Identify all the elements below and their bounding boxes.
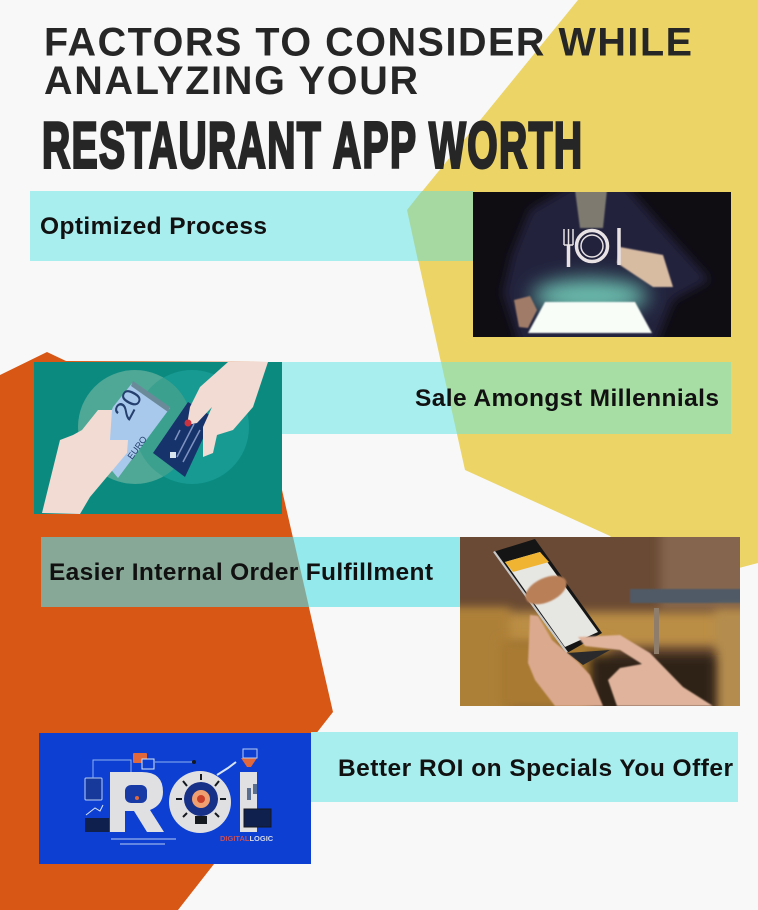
title line 1: FACTORS TO CONSIDER WHILE [44, 21, 692, 65]
title line 3: RESTAURANT APP WORTH [42, 109, 582, 182]
hands [528, 615, 603, 706]
credit card [153, 402, 213, 477]
hand right [187, 362, 268, 457]
band [41, 537, 460, 607]
label: Easier Internal Order Fulfillment [49, 559, 433, 586]
small icons: DIGITALLOGIC [220, 834, 274, 843]
letter I [240, 772, 257, 832]
band [30, 191, 473, 261]
letter R [110, 772, 164, 832]
label: Better ROI on Specials You Offer [338, 755, 733, 782]
orange background shape [0, 352, 333, 910]
phone [493, 539, 610, 665]
photo: hand touching plate icon above tablet [473, 185, 731, 345]
band [282, 362, 731, 434]
panel: sale amongst millennials [34, 362, 731, 514]
hand left [42, 410, 128, 514]
icon: plate and cutlery [564, 228, 619, 267]
letter O with bulb [169, 771, 231, 833]
band [311, 732, 738, 802]
panel: optimized process [30, 185, 731, 345]
banknote: 20 [108, 384, 148, 425]
title line 2: ANALYZING YOUR [44, 59, 418, 103]
banknote [110, 381, 170, 478]
illustration: ROI on blue [39, 733, 311, 864]
label: Sale Amongst Millennials [415, 385, 719, 412]
yellow background shape [407, 0, 758, 590]
small icons [85, 749, 274, 844]
title [42, 21, 692, 182]
illustration: hands exchanging money and card [34, 362, 282, 514]
banknote: EURO [126, 434, 149, 461]
panel: easier internal order fulfillment [41, 537, 740, 706]
photo: phone with food app in hands [460, 537, 740, 706]
panel: better roi on specials [39, 732, 738, 864]
label: Optimized Process [40, 213, 267, 240]
